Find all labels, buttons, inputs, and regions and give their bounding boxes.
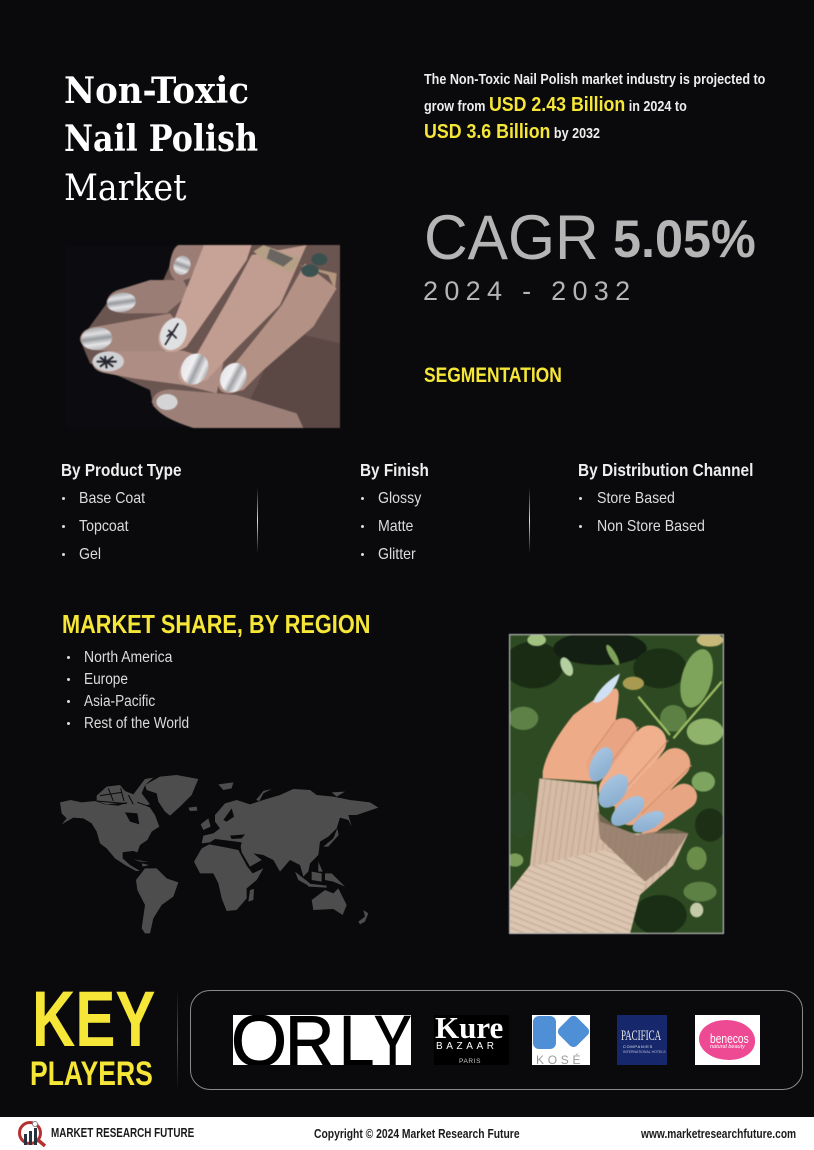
hand [543,688,692,822]
by distribution channel list [578,460,753,535]
logo: Kure Bazaar: PARIS [459,1058,481,1065]
key players heading: PLAYERS [30,1055,153,1093]
footer copyright: Copyright © 2024 Market Research Future [314,1127,520,1141]
CAGR figure: 5.05% [613,210,756,269]
footer website: www.marketresearchfuture.com [641,1127,796,1141]
by finish list: Glitter [378,546,416,563]
logo: benecos: natural beauty [710,1044,745,1050]
market projection text [424,72,765,143]
by finish list [360,460,429,563]
market share heading: MARKET SHARE, BY REGION [62,609,370,639]
market projection text: The Non-Toxic Nail Polish market industry is projected to [424,72,765,88]
photo: blue nails [508,633,725,935]
by distribution channel list: Store Based [597,490,675,507]
logo: Pacifica: INTERNATIONAL HOTELS [623,1050,666,1054]
market projection text: grow from USD 2.43 Billion in 2024 to [424,93,687,116]
segmentation heading: SEGMENTATION [424,364,562,387]
footer bar [0,1117,814,1150]
footer brand name: MARKET RESEARCH FUTURE [51,1126,194,1140]
title [64,70,258,209]
region list: Europe [84,671,128,688]
by product type list: Gel [79,546,101,563]
logo: Kure Bazaar [434,1015,509,1065]
logo: Pacifica: PACIFICA [621,1028,661,1044]
by distribution channel list: By Distribution Channel [578,460,753,480]
by distribution channel list: Non Store Based [597,518,705,535]
title: Nail Polish [64,118,258,160]
by finish list: Glossy [378,490,421,507]
icon: magnifier logo [18,1121,46,1147]
region list: North America [84,649,172,666]
logo: Kure Bazaar: BAZAAR [436,1041,498,1052]
title: Market [64,168,186,209]
region list [67,649,189,732]
by product type list: By Product Type [61,460,182,480]
key players logo panel [190,990,803,1090]
CAGR figure: 2024 - 2032 [423,276,636,306]
logo: KOSE [532,1015,590,1065]
market projection text: USD 3.6 Billion by 2032 [424,120,600,143]
by product type list: Base Coat [79,490,145,507]
by product type list: Topcoat [79,518,129,535]
region list: Asia-Pacific [84,693,155,710]
region list: Rest of the World [84,715,189,732]
by product type list [61,460,182,563]
key players heading: KEY [32,974,155,1063]
photo: silver nails [79,244,340,429]
logo: benecos: benecos [710,1032,749,1046]
CAGR figure [423,203,756,306]
by finish list: By Finish [360,460,429,480]
logo: ORLY [233,1015,411,1065]
logo: Pacifica [617,1015,667,1065]
logo: Pacifica: COMPANIES [623,1044,653,1049]
CAGR figure: CAGR [424,203,599,273]
world map [60,775,378,934]
by finish list: Matte [378,518,413,535]
logo: benecos [695,1015,760,1065]
title: Non-Toxic [64,70,249,112]
